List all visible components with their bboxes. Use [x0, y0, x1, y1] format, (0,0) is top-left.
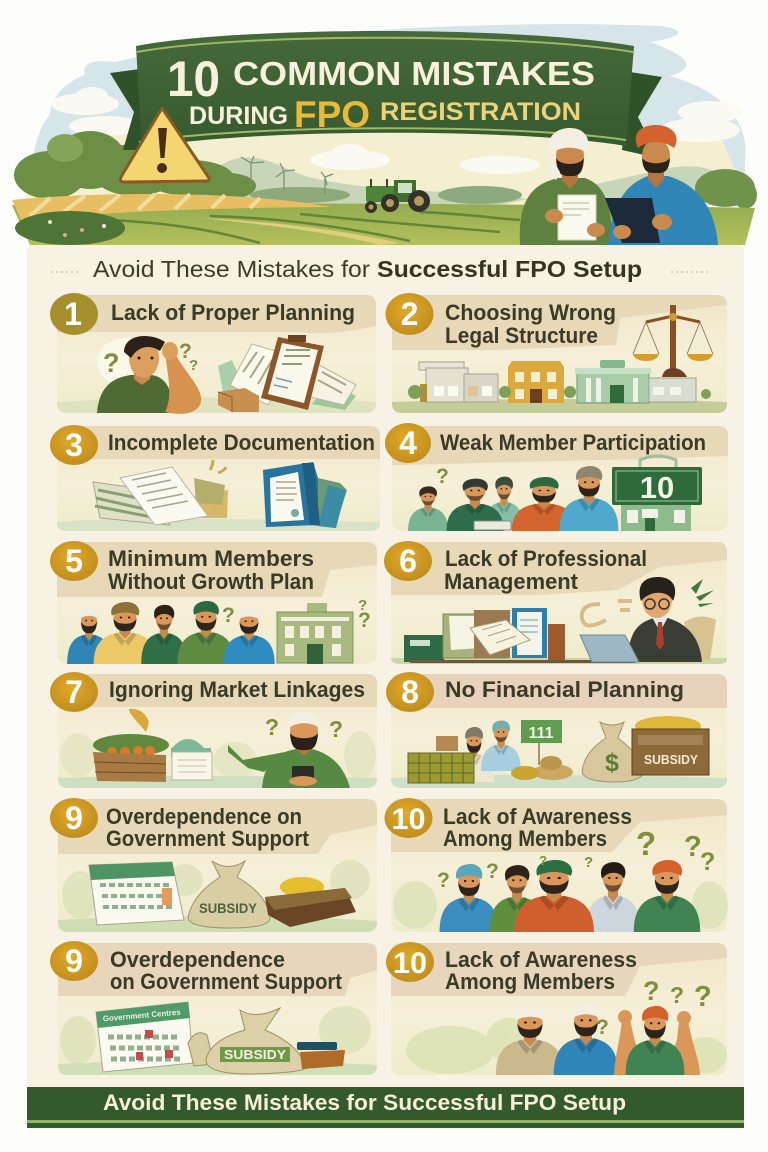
icon: large subsidy bag: SUBSIDY — [224, 1047, 286, 1062]
badge 10: 10 — [392, 803, 426, 836]
sky — [30, 24, 746, 200]
common mistakes: COMMON MISTAKES — [233, 55, 595, 92]
badge 4: 4 — [399, 425, 417, 461]
icon: government calendar: Government Centres — [103, 1008, 182, 1023]
question marks: ? — [486, 860, 499, 883]
heading: Legal Structure — [445, 323, 598, 348]
card 3: incomplete documentation — [50, 425, 380, 531]
foliage — [62, 860, 370, 919]
heading: No Financial Planning — [445, 677, 684, 702]
illustration: subsidy crate — [632, 716, 709, 775]
header landscape scene — [12, 24, 757, 245]
heading: Lack of Awareness — [445, 947, 637, 972]
heading: Lack of Proper Planning — [111, 300, 355, 325]
right trees — [695, 169, 757, 209]
badge 9: 9 — [65, 800, 83, 836]
illustration: white office — [419, 362, 498, 402]
foliage — [393, 881, 728, 929]
illustration: green building — [277, 603, 353, 664]
illustration: confused farmer: ? — [179, 340, 192, 363]
heading: Among Members — [443, 826, 607, 851]
card 10: lack of awareness among members — [384, 798, 728, 932]
icon: green alert burst — [691, 579, 714, 607]
badge 9 — [50, 798, 98, 838]
main panel — [27, 245, 744, 1129]
badge 7 — [50, 672, 98, 712]
heading: on Government Support — [110, 969, 343, 994]
heading — [106, 804, 310, 851]
group of members — [440, 860, 700, 932]
badge 8 — [386, 672, 434, 712]
illustration: farmer shrugging — [228, 712, 350, 788]
foliage — [60, 731, 376, 779]
footer banner — [27, 1087, 744, 1128]
question marks — [222, 597, 371, 632]
signboard with number 10: 10 — [640, 470, 674, 505]
header band — [392, 295, 727, 350]
question marks: ? — [539, 853, 547, 868]
sky lower glow — [20, 128, 750, 205]
badge 6: 6 — [399, 543, 417, 579]
ground — [391, 658, 727, 664]
question marks: ? — [222, 604, 235, 627]
heading — [445, 300, 616, 348]
illustration: vegetable crate — [93, 709, 169, 782]
heading: Management — [444, 569, 579, 594]
badge 3: 3 — [65, 427, 83, 463]
badge 10: 10 — [393, 947, 427, 980]
badge 5 — [50, 541, 98, 581]
heading — [445, 947, 637, 994]
badge 9: 9 — [65, 943, 83, 979]
card 5: minimum members without growth plan — [50, 541, 377, 664]
illustration: yellow office — [508, 361, 564, 403]
badge 10 — [386, 942, 434, 982]
badge 9 — [50, 941, 98, 981]
question marks: ? — [358, 609, 371, 632]
wind turbines — [241, 156, 333, 194]
illustration: farmer shrugging: ? — [329, 716, 343, 742]
foliage — [406, 1018, 727, 1074]
card 9: overdependence on government support — [50, 798, 377, 932]
trees — [408, 385, 711, 399]
ground — [58, 1061, 377, 1075]
ground — [58, 916, 377, 932]
number ten: 10 — [167, 51, 220, 107]
tractor — [365, 179, 430, 213]
badge 1 — [50, 293, 98, 335]
header band — [392, 426, 728, 465]
badge 10 — [384, 798, 432, 838]
icon: subsidy bag — [188, 861, 270, 928]
icon: calendar — [89, 862, 184, 925]
badge 5: 5 — [65, 543, 83, 579]
illustration: paper pile — [93, 460, 228, 525]
question marks: ? — [670, 982, 684, 1008]
question marks: ? — [694, 981, 712, 1013]
card 6: lack of professional management — [384, 541, 727, 664]
header band — [57, 426, 380, 459]
badge 1: 1 — [64, 296, 82, 332]
ground — [391, 775, 727, 788]
badge 6 — [384, 541, 432, 581]
title line two — [189, 94, 581, 135]
title line one — [167, 51, 595, 107]
badge 8: 8 — [401, 674, 419, 710]
FPO: FPO — [294, 94, 370, 135]
header band — [58, 799, 377, 854]
distant hills — [190, 158, 740, 205]
icon: warning triangle — [120, 108, 209, 182]
heading: Lack of Professional — [445, 546, 647, 571]
question marks: ? — [643, 976, 660, 1006]
illustration: farmers with ledger: 111 — [529, 725, 554, 742]
foliage — [60, 1006, 371, 1064]
illustration: farmers with ledger — [408, 720, 573, 783]
question marks: ? — [596, 1016, 609, 1039]
illustration: blue binder — [263, 462, 347, 528]
question marks: ? — [636, 825, 656, 862]
ground — [57, 519, 380, 531]
header band — [57, 542, 377, 597]
icon: large subsidy bag — [188, 1008, 306, 1074]
icon: money bag — [582, 722, 644, 782]
banner light trim — [137, 38, 633, 142]
question marks: ? — [700, 848, 715, 876]
heading: Overdependence — [110, 947, 285, 972]
header band — [391, 799, 727, 852]
group of members — [496, 1002, 700, 1075]
header band — [391, 674, 727, 708]
banner body — [136, 31, 634, 148]
farmer with document — [520, 128, 612, 245]
heading: Without Growth Plan — [108, 569, 314, 594]
illustration: manager at laptop — [580, 577, 716, 662]
subtitle bold part: Successful FPO Setup — [377, 256, 642, 282]
question marks — [437, 825, 715, 892]
group of members: ? — [436, 465, 449, 488]
badge 4 — [385, 423, 431, 463]
faded idea sketch — [582, 601, 632, 626]
dotted right — [671, 271, 708, 273]
registration: REGISTRATION — [380, 98, 581, 126]
icon: balance scales — [633, 305, 713, 377]
header band — [58, 943, 377, 996]
card 7: ignoring market linkages — [50, 672, 377, 788]
illustration: subsidy crate: SUBSIDY — [644, 752, 698, 767]
heading — [108, 546, 314, 594]
illustration: confused farmer: ? — [103, 348, 120, 378]
heading: Lack of Awareness — [443, 804, 632, 829]
heading: Weak Member Participation — [440, 430, 706, 455]
heading: Minimum Members — [108, 546, 314, 571]
card 1: lack of proper planning — [50, 293, 376, 414]
ribbon tails — [110, 69, 145, 150]
header band — [58, 674, 377, 707]
header band — [57, 295, 376, 333]
heading: Government Support — [106, 826, 310, 851]
yellow striped field — [12, 194, 330, 222]
badge 7: 7 — [65, 674, 83, 710]
heading: Ignoring Market Linkages — [109, 677, 365, 702]
illustration: green office — [575, 360, 696, 403]
group of members — [67, 601, 275, 664]
header band — [391, 943, 727, 996]
icon: money bag: $ — [605, 749, 619, 777]
ground — [58, 776, 377, 788]
footer trim — [27, 1120, 744, 1123]
group of members — [408, 465, 618, 531]
heading: Overdependence on — [106, 804, 302, 829]
heading — [443, 804, 632, 851]
during: DURING — [189, 102, 288, 130]
subtitle — [51, 256, 708, 282]
icon: calendar — [171, 739, 212, 780]
badge 2 — [386, 293, 434, 335]
question marks — [596, 976, 712, 1039]
left trees — [14, 131, 522, 204]
card 4: weak member participation — [385, 423, 728, 531]
footer text: Avoid These Mistakes for Successful FPO Setup — [103, 1090, 626, 1115]
flowering bush — [15, 211, 125, 245]
icon: subsidy bag: SUBSIDY — [199, 900, 258, 916]
crop field — [12, 203, 755, 245]
farmer with clipboard — [605, 125, 718, 245]
question marks: ? — [358, 597, 367, 614]
heading: Incomplete Documentation — [108, 430, 375, 455]
question marks: ? — [684, 831, 702, 863]
card 2: choosing wrong legal structure — [386, 293, 727, 413]
heading: Choosing Wrong — [445, 300, 616, 325]
ribbon right tail — [622, 72, 662, 158]
illustration: documents and clipboard — [218, 335, 356, 412]
heading — [444, 546, 647, 594]
icon: government calendar — [96, 1002, 193, 1072]
heading — [110, 947, 343, 994]
illustration: confused farmer: ? — [189, 357, 198, 374]
card 9 repeat: overdependence on government support — [50, 941, 377, 1075]
illustration: books — [297, 1042, 345, 1069]
question marks: ? — [584, 854, 593, 871]
field rows — [110, 212, 520, 243]
illustration: farmer shrugging: ? — [265, 714, 279, 740]
clouds — [51, 87, 742, 174]
title banner — [110, 31, 662, 158]
illustration: wallet with gold — [265, 877, 356, 927]
signboard with number 10 — [612, 456, 702, 531]
ground — [57, 398, 376, 413]
header band — [391, 542, 727, 595]
illustration: confused farmer — [97, 336, 201, 414]
heading: Among Members — [445, 969, 615, 994]
question marks: ? — [437, 869, 450, 892]
subtitle regular part: Avoid These Mistakes for — [93, 256, 370, 282]
card 8: no financial planning — [386, 672, 727, 788]
badge 2: 2 — [401, 296, 418, 332]
dotted left — [51, 271, 81, 273]
badge 3 — [50, 425, 98, 465]
card 10 repeat: lack of awareness among members — [386, 942, 727, 1075]
illustration: files on desk — [404, 608, 635, 663]
ground — [392, 399, 727, 413]
